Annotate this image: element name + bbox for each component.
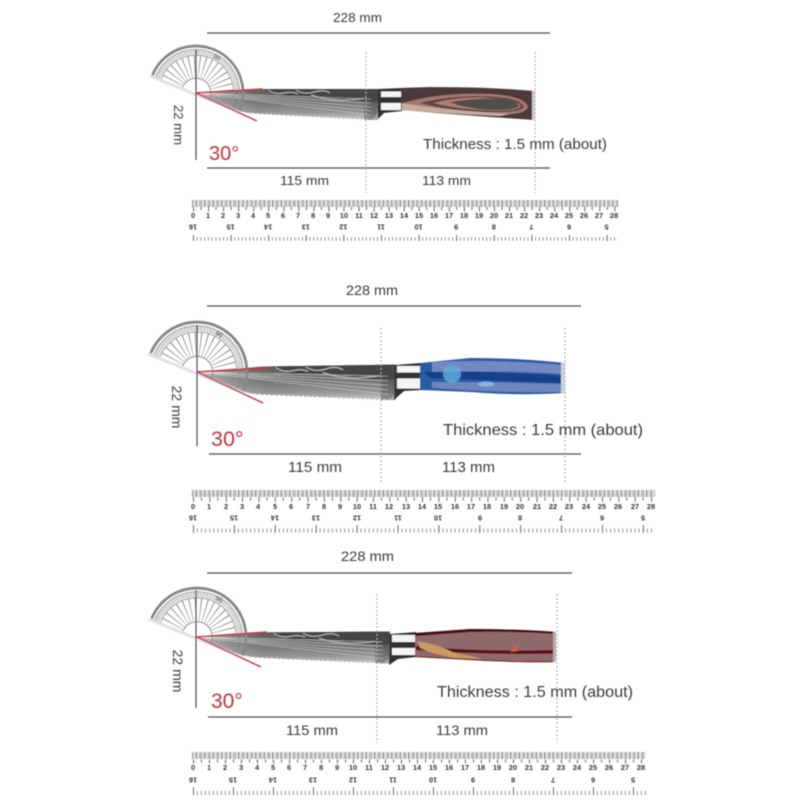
ruler: 13: [385, 211, 393, 220]
ruler: 7: [559, 514, 563, 522]
label: blade length: 115 mm: [286, 722, 338, 738]
ruler: 14: [400, 211, 409, 220]
ruler: 17: [467, 502, 475, 511]
ruler: 5: [273, 502, 277, 511]
protractor label: 90: [214, 330, 224, 340]
ruler: 9: [335, 763, 339, 772]
ruler: 10: [414, 222, 423, 232]
label: handle length: 113 mm: [436, 722, 488, 738]
ruler: 16: [430, 211, 438, 220]
ruler: 28: [637, 763, 645, 772]
angle lines: [196, 89, 262, 121]
dashed marker: blade end: [365, 52, 367, 193]
ruler: 22: [549, 502, 557, 511]
ruler: 3: [239, 763, 243, 772]
label: blade length: 115 mm: [288, 460, 342, 476]
ruler: 27: [621, 763, 629, 772]
knife: blue resin handle: [420, 358, 565, 394]
label: thickness: Thickness : 1.5 mm (about): [423, 137, 607, 153]
ruler: 13: [302, 222, 310, 232]
ruler: 2: [224, 502, 228, 511]
ruler: 10: [353, 502, 361, 511]
panel: red resin handle knife: [131, 548, 646, 793]
label: total length: 228 mm: [341, 548, 394, 564]
ruler: 11: [389, 776, 397, 784]
protractor label: 90: [214, 595, 224, 605]
label: height: 22 mm: [169, 386, 185, 428]
ruler: 4: [256, 502, 261, 511]
ruler: 6: [289, 502, 293, 511]
ruler: 5: [605, 222, 609, 232]
ruler: 28: [647, 502, 655, 511]
ruler: 18: [477, 763, 485, 772]
ruler: 15: [434, 502, 442, 511]
label: blade length: 115 mm: [280, 173, 329, 188]
ruler: 12: [349, 776, 357, 784]
knife: wood handle: [401, 87, 535, 120]
ruler: 10: [349, 763, 357, 772]
label: angle: 30°: [211, 427, 244, 451]
section line: [209, 453, 581, 455]
ruler: 20: [509, 763, 517, 772]
ruler: 5: [631, 776, 635, 784]
ruler: 8: [311, 211, 315, 220]
section line: [207, 167, 550, 169]
protractor: [133, 31, 259, 155]
ruler: 23: [535, 211, 543, 220]
ruler: 3: [236, 211, 240, 220]
ruler: 10: [340, 211, 348, 220]
ruler: 7: [529, 222, 533, 232]
ruler: 4: [255, 763, 260, 772]
dashed marker: blade end: [376, 594, 378, 743]
ruler: 7: [303, 763, 307, 772]
ruler: 6: [591, 776, 595, 784]
ruler: 2: [221, 211, 225, 220]
ruler: 4: [251, 211, 256, 220]
ruler: 12: [339, 222, 348, 232]
protractor: [130, 306, 264, 438]
dashed marker: blade end: [380, 328, 382, 482]
ruler: 25: [589, 763, 597, 772]
ruler: 9: [326, 211, 330, 220]
ruler: 7: [551, 776, 555, 784]
ruler: 24: [573, 763, 582, 772]
label: total length: 228 mm: [346, 282, 398, 298]
ruler: 8: [511, 776, 515, 784]
ruler: 6: [281, 211, 285, 220]
ruler: 10: [434, 514, 442, 522]
ruler: 8: [319, 763, 323, 772]
ruler: 9: [478, 514, 482, 522]
knife: damascus serrated blade: [197, 365, 396, 403]
ruler: 8: [322, 502, 326, 511]
ruler: 14: [263, 222, 272, 232]
label: total length: 228 mm: [333, 10, 382, 25]
height line: [195, 590, 197, 708]
ruler: 0: [191, 502, 195, 511]
label: thickness: Thickness : 1.5 mm (about): [437, 684, 633, 701]
ruler: 0: [191, 211, 195, 220]
ruler: 21: [505, 211, 513, 220]
ruler: 16: [189, 514, 197, 522]
knife: bolster: [394, 363, 421, 400]
section line: [208, 716, 572, 718]
total length line: [207, 572, 572, 574]
ruler: 19: [500, 502, 508, 511]
ruler: 16: [189, 222, 197, 232]
ruler: 7: [306, 502, 310, 511]
ruler: 18: [483, 502, 491, 511]
ruler: 6: [287, 763, 291, 772]
ruler: 1: [206, 211, 210, 220]
knife: red resin handle: [415, 629, 556, 662]
ruler: 15: [226, 222, 235, 232]
dashed marker: handle end: [534, 52, 536, 193]
ruler: 12: [370, 211, 378, 220]
label: handle length: 113 mm: [422, 173, 471, 188]
ruler: 23: [557, 763, 565, 772]
ruler: 11: [377, 222, 385, 232]
ruler: 26: [614, 502, 622, 511]
dashed marker: handle end: [556, 594, 558, 743]
ruler: 6: [567, 222, 571, 232]
ruler: 1: [207, 763, 211, 772]
ruler: 14: [418, 502, 427, 511]
ruler: 0: [191, 763, 195, 772]
knife: bolster: [378, 88, 402, 119]
ruler: 12: [381, 763, 389, 772]
ruler: 14: [268, 776, 277, 784]
ruler: 9: [338, 502, 342, 511]
ruler: 12: [353, 514, 361, 522]
ruler: [189, 204, 618, 239]
ruler: 5: [641, 514, 645, 522]
ruler: 17: [445, 211, 453, 220]
total length line: [207, 32, 550, 34]
ruler: 24: [582, 502, 591, 511]
ruler: 10: [429, 776, 437, 784]
panel: blue resin handle knife: [130, 282, 655, 530]
ruler: 5: [266, 211, 270, 220]
ruler: 21: [525, 763, 533, 772]
ruler: 8: [518, 514, 522, 522]
height line: [195, 50, 197, 160]
ruler: 9: [454, 222, 458, 232]
ruler: 5: [271, 763, 275, 772]
ruler: 22: [541, 763, 549, 772]
ruler: 9: [471, 776, 475, 784]
label: handle length: 113 mm: [442, 460, 495, 476]
ruler: 13: [312, 514, 320, 522]
ruler: 13: [397, 763, 405, 772]
label: angle: 30°: [211, 690, 243, 713]
ruler: 12: [385, 502, 393, 511]
ruler: 18: [460, 211, 468, 220]
ruler: 13: [309, 776, 317, 784]
ruler: 13: [402, 502, 410, 511]
protractor: [131, 573, 263, 701]
ruler: 6: [600, 514, 604, 522]
label: angle: 30°: [209, 143, 239, 165]
knife: damascus serrated blade: [197, 632, 390, 665]
ruler: 26: [605, 763, 613, 772]
ruler: 3: [240, 502, 244, 511]
label: height: 22 mm: [170, 650, 186, 692]
ruler: 25: [565, 211, 573, 220]
ruler: 27: [631, 502, 639, 511]
label: height: 22 mm: [171, 105, 186, 145]
knife: damascus serrated blade: [196, 89, 378, 120]
ruler: 11: [369, 502, 377, 511]
ruler: 15: [230, 514, 238, 522]
dashed marker: handle end: [564, 328, 566, 482]
ruler: 17: [461, 763, 469, 772]
ruler: 15: [415, 211, 423, 220]
ruler: 15: [229, 776, 237, 784]
ruler: 23: [565, 502, 573, 511]
ruler: 14: [413, 763, 422, 772]
angle lines: [197, 632, 267, 667]
ruler: [189, 756, 646, 793]
ruler: 11: [365, 763, 373, 772]
ruler: 7: [296, 211, 300, 220]
ruler: 21: [533, 502, 541, 511]
label: thickness: Thickness : 1.5 mm (about): [443, 422, 643, 439]
ruler: 19: [493, 763, 501, 772]
total length line: [207, 305, 581, 307]
ruler: 11: [355, 211, 363, 220]
ruler: 1: [207, 502, 211, 511]
ruler: 14: [270, 514, 279, 522]
ruler: 20: [490, 211, 498, 220]
ruler: 16: [451, 502, 459, 511]
angle lines: [197, 368, 268, 403]
ruler: 16: [189, 776, 197, 784]
height line: [196, 325, 198, 446]
ruler: 28: [610, 211, 618, 220]
ruler: 2: [223, 763, 227, 772]
ruler: 16: [445, 763, 453, 772]
ruler: 26: [580, 211, 588, 220]
ruler: 19: [475, 211, 483, 220]
protractor label: 90: [212, 54, 221, 63]
ruler: 27: [595, 211, 603, 220]
ruler: 11: [394, 514, 402, 522]
ruler: 15: [429, 763, 437, 772]
knife: bolster: [389, 632, 416, 665]
ruler: 8: [492, 222, 496, 232]
ruler: 22: [520, 211, 528, 220]
ruler: 20: [516, 502, 524, 511]
ruler: [189, 494, 655, 530]
ruler: 24: [550, 211, 559, 220]
ruler: 25: [598, 502, 606, 511]
panel: wood handle knife: [133, 10, 618, 239]
